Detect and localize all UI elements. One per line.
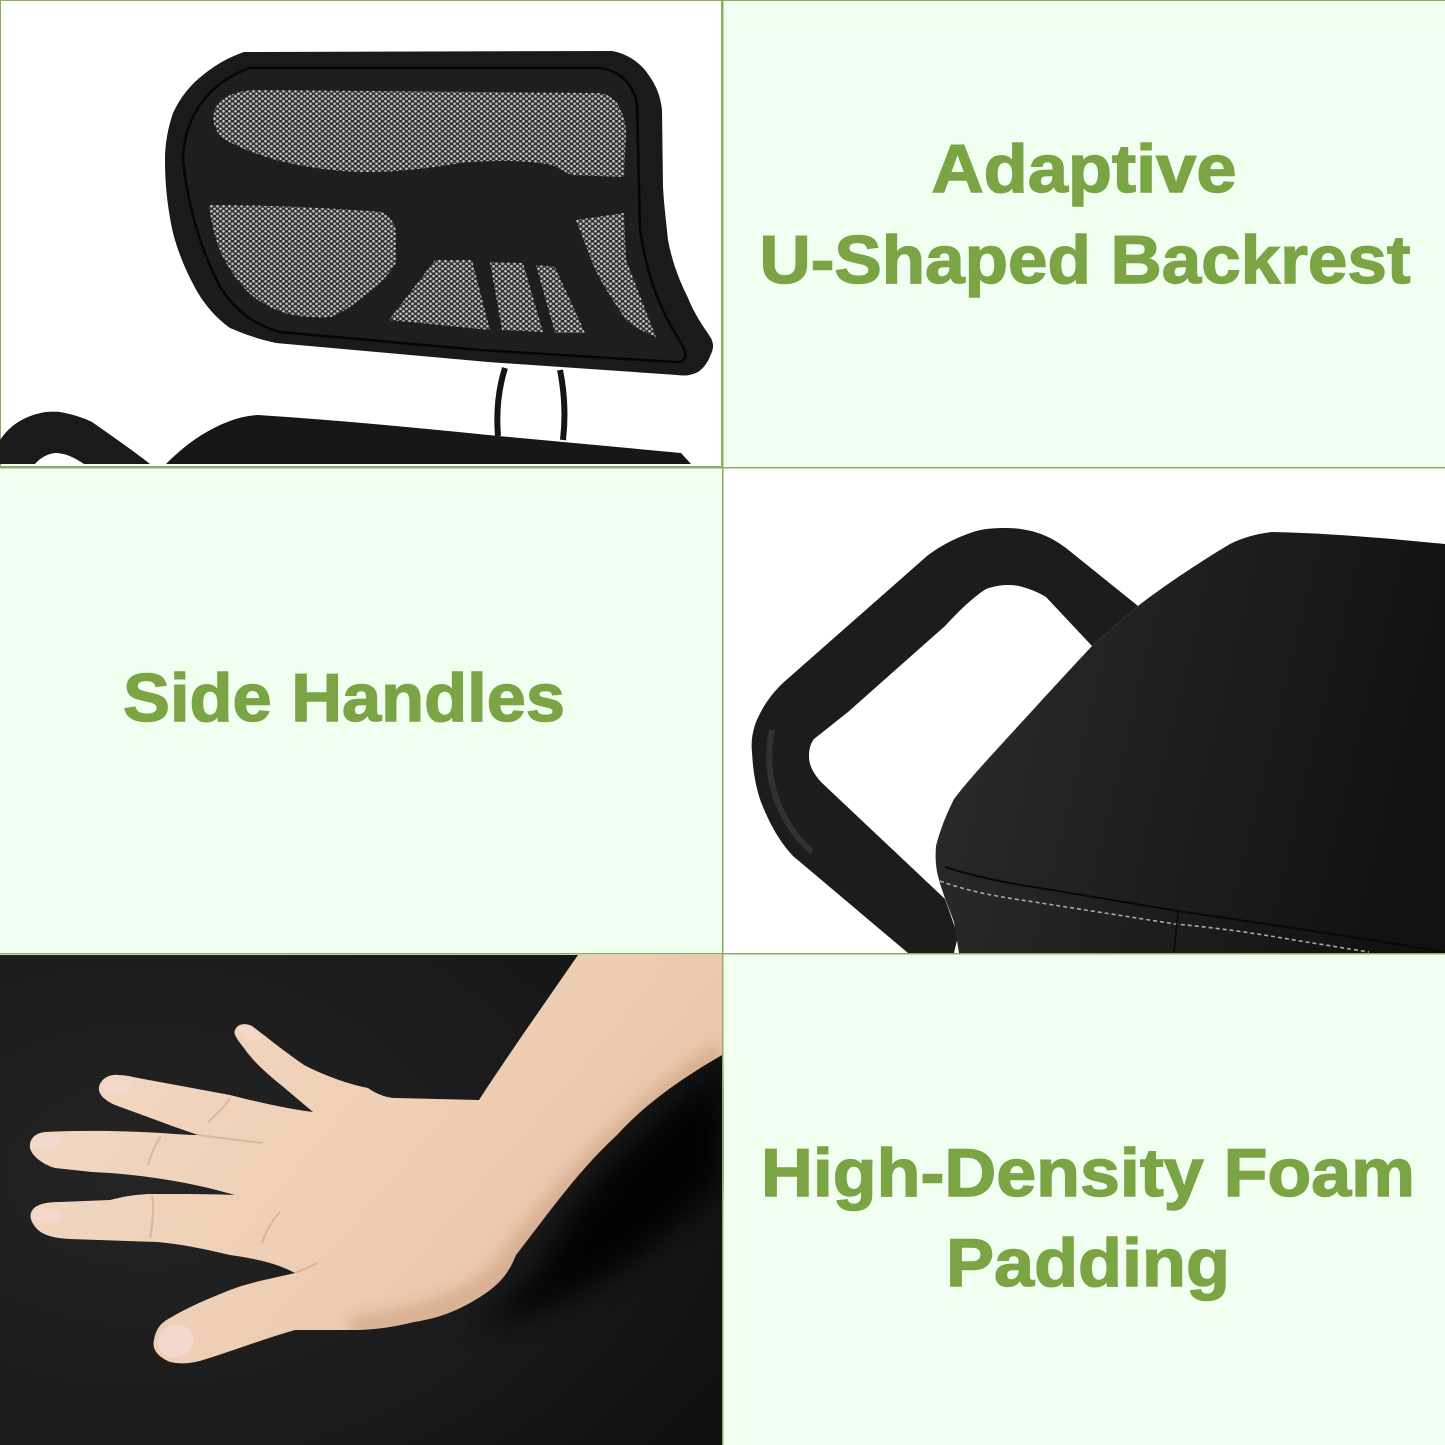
icon: hand shadow <box>470 1070 722 1325</box>
icon: finger creases <box>148 1098 318 1273</box>
icon: left mesh <box>209 205 396 317</box>
icon: fingernails <box>33 1023 262 1362</box>
panel: foam padding label <box>724 955 1445 1445</box>
icon: hand and arm <box>30 955 722 1363</box>
heading: high-density foam: High-Density Foam <box>761 1135 1415 1211</box>
icon: seat stitching <box>940 881 1369 952</box>
icon: seat top <box>166 415 691 464</box>
panel: adaptive backrest label <box>723 0 1445 468</box>
icon: seat seam <box>945 867 1445 952</box>
panel: backrest photo <box>0 0 722 466</box>
panel: handle photo <box>724 469 1445 953</box>
panel: side handles label <box>0 469 722 953</box>
icon: hand shading <box>350 1055 722 1330</box>
heading: padding: Padding <box>946 1225 1230 1301</box>
heading: u-shaped backrest: U-Shaped Backrest <box>760 222 1410 298</box>
icon: upper mesh <box>213 90 626 177</box>
icon: support posts <box>497 368 564 440</box>
icon: backrest inner trim <box>183 68 685 362</box>
icon: vertical seam <box>1174 912 1178 953</box>
icon: handle highlight <box>769 730 812 852</box>
icon: handle top <box>0 412 150 464</box>
icon: seat cushion <box>936 532 1445 953</box>
heading: adaptive: Adaptive <box>932 131 1236 207</box>
heading: side handles: Side Handles <box>123 660 565 736</box>
icon: backrest frame <box>165 51 713 376</box>
icon: handle <box>752 528 1138 953</box>
icon: lower mesh strips <box>389 213 656 337</box>
panel: hand on foam photo <box>0 955 722 1445</box>
